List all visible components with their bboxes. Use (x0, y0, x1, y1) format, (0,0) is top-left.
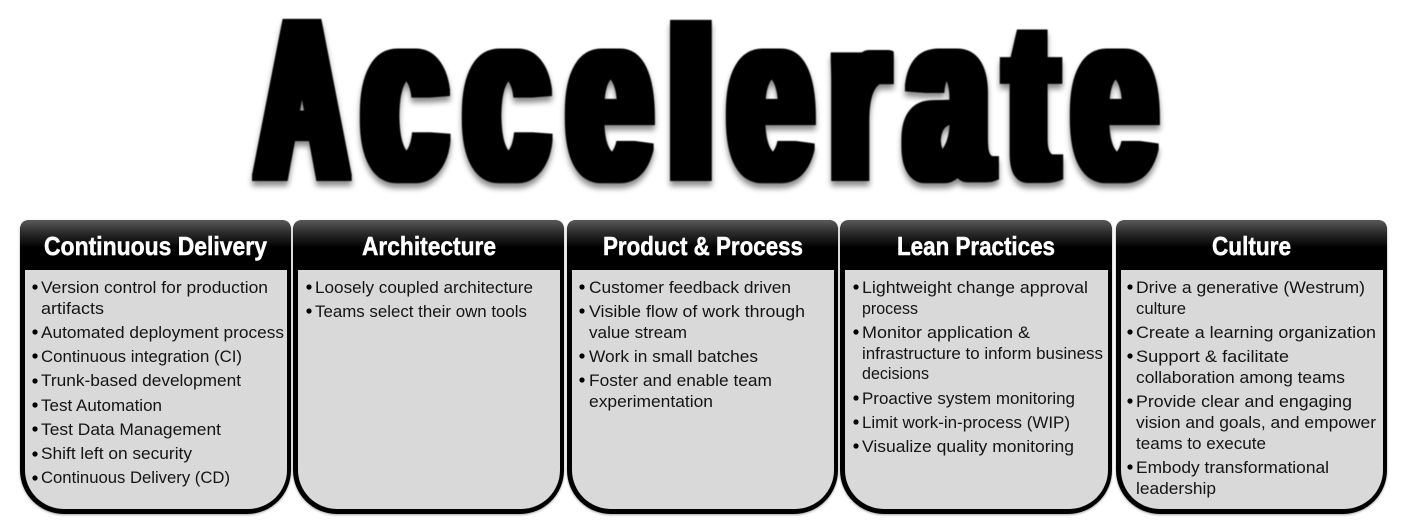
header band (1116, 220, 1387, 270)
bullet list: Limit work-in-process (WIP) (862, 413, 1070, 432)
panel body (845, 270, 1108, 509)
bullet list: infrastructure to inform business (862, 344, 1103, 363)
bullet list: Embody transformational (1136, 458, 1329, 477)
panel frame (20, 220, 291, 514)
bullet list: Work in small batches (589, 347, 758, 366)
bullet list: Automated deployment process (41, 323, 284, 342)
bullet list: culture (1136, 299, 1186, 318)
heading: Culture (1212, 231, 1291, 261)
panel: Continuous Delivery (20, 220, 291, 514)
heading: Lean Practices (897, 231, 1055, 261)
bullet list: collaboration among teams (1136, 368, 1345, 387)
bullet list: Visualize quality monitoring (862, 437, 1074, 456)
bullet list: Foster and enable team (589, 371, 772, 390)
bullet list: leadership (1136, 479, 1216, 498)
bullet list: Shift left on security (41, 444, 193, 463)
panel: Architecture (293, 220, 564, 514)
bullet list (306, 278, 533, 321)
header band (20, 220, 291, 270)
bullet list: Drive a generative (Westrum) (1136, 278, 1365, 297)
bullet list: value stream (589, 323, 687, 342)
bullet list: decisions (862, 364, 929, 383)
bullet list: Continuous integration (CI) (41, 347, 242, 366)
panel body (1121, 270, 1383, 509)
bullet list: Provide clear and engaging (1136, 392, 1352, 411)
bullet list: Trunk-based development (41, 371, 241, 390)
panel body (572, 270, 834, 509)
bullet list: Customer feedback driven (589, 278, 791, 297)
bullet list: Loosely coupled architecture (315, 278, 533, 297)
bullet list (579, 278, 805, 411)
bullet list: vision and goals, and empower (1136, 413, 1376, 432)
panel body (25, 270, 287, 509)
bullet list (32, 278, 284, 487)
bullet list: Proactive system monitoring (862, 389, 1075, 408)
bullet list: process (862, 299, 918, 318)
heading: Continuous Delivery (44, 231, 267, 261)
bullet list: Version control for production (41, 278, 268, 297)
bullet list: Support & facilitate (1136, 347, 1289, 366)
panel body (298, 270, 560, 509)
bullet list: experimentation (589, 392, 713, 411)
heading: Product & Process (603, 231, 803, 261)
bullet list: artifacts (41, 299, 104, 318)
panel: Lean Practices (840, 220, 1112, 514)
panel: Culture (1116, 220, 1387, 514)
panel: Product & Process (567, 220, 838, 514)
bullet list: Continuous Delivery (CD) (41, 468, 230, 487)
bullet list (853, 278, 1103, 456)
panel frame (840, 220, 1112, 514)
panel frame (1116, 220, 1387, 514)
bullet list: Teams select their own tools (315, 302, 527, 321)
bullet list: Test Data Management (41, 420, 221, 439)
header band (567, 220, 838, 270)
heading: Architecture (362, 231, 496, 261)
panel frame (567, 220, 838, 514)
bullet list: Lightweight change approval (862, 278, 1088, 297)
bullet list (1127, 278, 1376, 498)
title (258, 0, 1156, 228)
bullet list: Test Automation (41, 396, 162, 415)
bullet list: teams to execute (1136, 434, 1266, 453)
header band (840, 220, 1112, 270)
bullet list: Visible flow of work through (589, 302, 805, 321)
bullet list: Create a learning organization (1136, 323, 1376, 342)
bullet list: Monitor application & (862, 323, 1031, 342)
header band (293, 220, 564, 270)
panel frame (293, 220, 564, 514)
